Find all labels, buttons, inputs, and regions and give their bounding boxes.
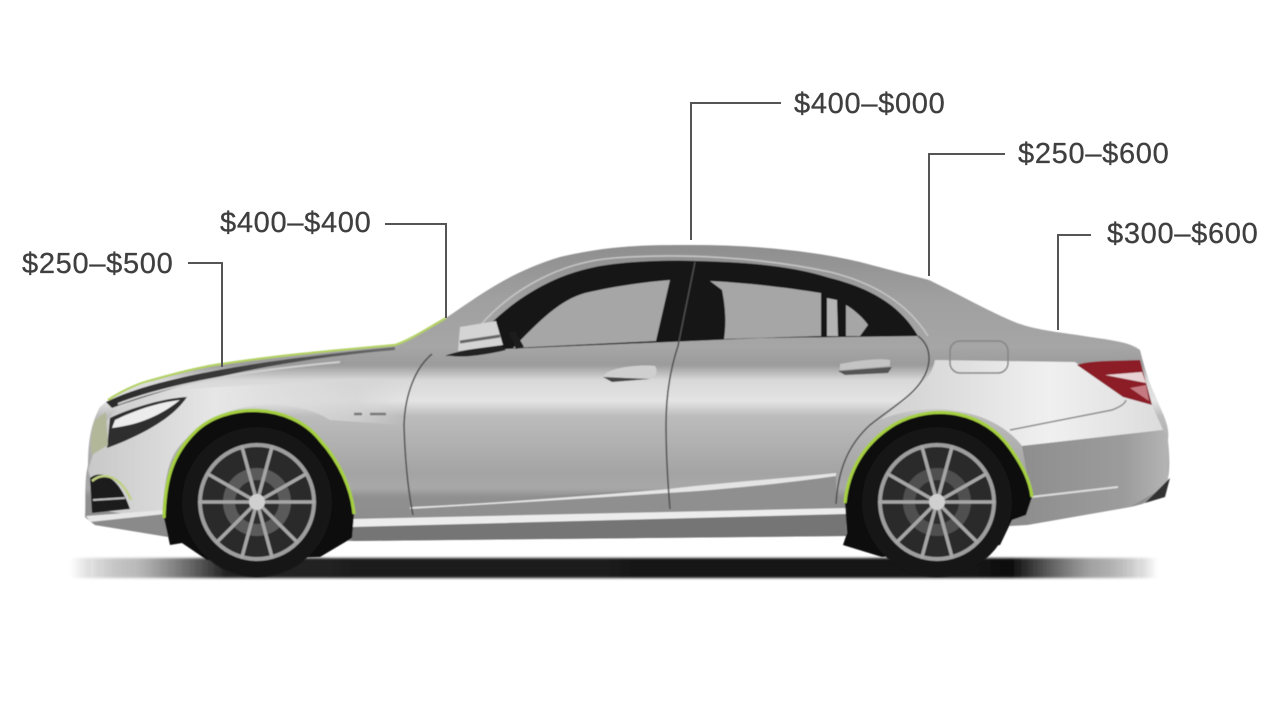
sill shadow bbox=[352, 513, 846, 541]
hood dark line bbox=[106, 347, 395, 408]
tail light bbox=[1077, 360, 1152, 405]
fog lamp bbox=[90, 475, 131, 513]
callout: rear pillar: $250–$600 bbox=[1018, 138, 1169, 170]
door seams bbox=[404, 262, 929, 515]
callout: windshield bbox=[220, 207, 446, 318]
front wheel bbox=[182, 427, 332, 577]
rear wheel arch bbox=[843, 412, 1032, 557]
headlight bbox=[107, 397, 187, 448]
door crease highlight bbox=[410, 473, 836, 509]
front fender highlight bbox=[88, 378, 404, 520]
callout: roof bbox=[691, 88, 945, 240]
sill highlight bbox=[352, 508, 846, 527]
door lower panel bbox=[408, 476, 836, 518]
callout: windshield: $400–$400 bbox=[220, 207, 371, 239]
front door handle bbox=[603, 365, 657, 382]
front window glass bbox=[513, 280, 670, 348]
callout: hood bbox=[22, 248, 222, 367]
rear window glass bbox=[710, 281, 821, 339]
rear wheel bbox=[862, 427, 1012, 577]
rear bumper crease bbox=[1031, 487, 1118, 497]
car illustration bbox=[85, 245, 1170, 577]
rear bumper panel bbox=[1022, 430, 1168, 525]
rear door handle bbox=[838, 359, 892, 375]
window frame bbox=[480, 261, 918, 349]
fuel door bbox=[950, 341, 1008, 373]
callout: hood: $250–$500 bbox=[22, 248, 173, 280]
side badge bbox=[354, 413, 386, 415]
callout: trunk: $300–$600 bbox=[1107, 218, 1258, 250]
ground shadow bbox=[70, 558, 1180, 578]
callout: roof: $400–$000 bbox=[794, 88, 945, 120]
front bumper lip bbox=[86, 512, 168, 537]
rear window sliver bbox=[827, 298, 838, 336]
hood outline highlight bbox=[108, 318, 446, 400]
grille bbox=[91, 412, 108, 455]
side mirror bbox=[445, 321, 524, 357]
quarter window glass bbox=[846, 305, 868, 336]
front wheel arch bbox=[164, 410, 354, 560]
chrome roof trim bbox=[478, 256, 928, 336]
callout: rear pillar bbox=[929, 138, 1169, 276]
rear arch outline bbox=[845, 412, 1032, 503]
car body bbox=[85, 245, 1169, 541]
rear quarter highlight bbox=[880, 360, 1163, 446]
exhaust shadow bbox=[1145, 478, 1170, 503]
hood light strip bbox=[118, 362, 340, 404]
callout: trunk bbox=[1058, 218, 1258, 330]
front arch outline bbox=[164, 410, 354, 518]
